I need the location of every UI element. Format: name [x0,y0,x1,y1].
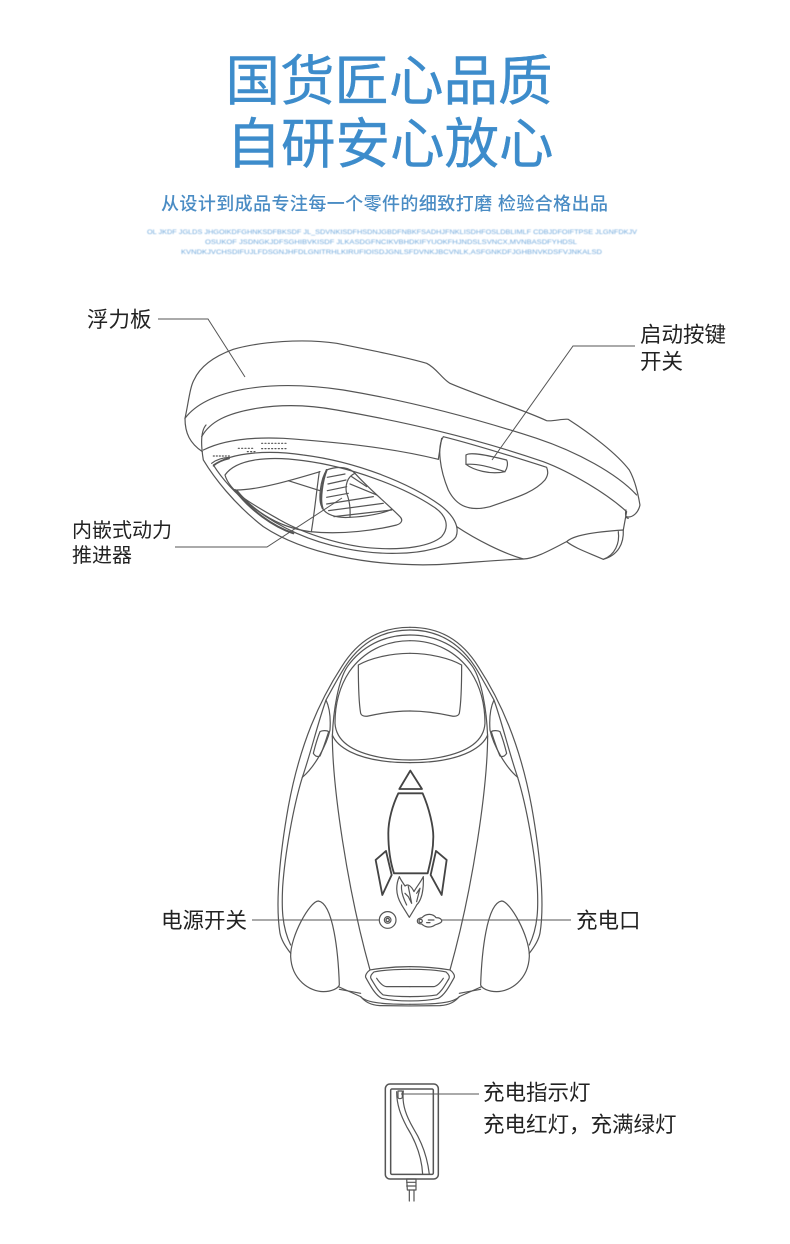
right half of body outline [410,627,542,1006]
charger illustration [385,1084,438,1201]
label: 启动按键开关: 开关 [640,350,683,374]
label: 充电口: 充电口 [576,909,641,933]
label: 充电红灯，充满绿灯: 充电红灯，充满绿灯 [483,1113,677,1137]
label: 启动按键开关 [492,323,726,460]
small english text [147,230,637,256]
left half of body outline [278,627,410,1006]
title: 国货匠心品质 [225,51,553,112]
small english text: OSUKOF JSDNGKJDFSGHIBVKISDF JLKASDGFNCIKVBHDKIFYUOKFHJNDSLSVNCX,MVNBASDFYHDSL [205,240,578,246]
power button [379,912,396,928]
label: 电源开关: 电源开关 [161,909,247,933]
label: 启动按键开关: 启动按键 [640,323,726,347]
label: 内嵌式动力推进器: 推进器 [72,544,132,567]
title [225,51,554,175]
device top view illustration [278,627,542,1006]
rocket logo [376,771,447,895]
device side view illustration [185,341,640,565]
title: 自研安心放心 [226,114,554,175]
label: 浮力板: 浮力板 [87,308,152,332]
small english text: OL JKDF JGLDS JHGOIKDFGHNKSDFBKSDF JL_SDVNKISDFHSDNJGBDFNBKFSADHJFNKLISDHFOSLDBLIMLF CDBJDFOIFTPSE JLGNFDKJV [147,230,637,236]
label: 充电指示灯: 充电指示灯 [483,1081,591,1105]
subtitle: 从设计到成品专注每一个零件的细致打磨 检验合格出品 [161,193,608,214]
charge port [417,914,442,927]
flame [397,877,423,917]
label: 浮力板 [87,308,245,377]
label: 内嵌式动力推进器 [72,498,342,567]
small english text: KVNDKJVCHSDIFUJLFDSGNJHFDLGNITRHLKIRUFIOISDJGNLSFDVNKJBCVNLK,ASFGNKDFJGHBNVKDSFVJNKALSD [181,250,603,256]
label: 内嵌式动力推进器: 内嵌式动力 [72,519,172,542]
